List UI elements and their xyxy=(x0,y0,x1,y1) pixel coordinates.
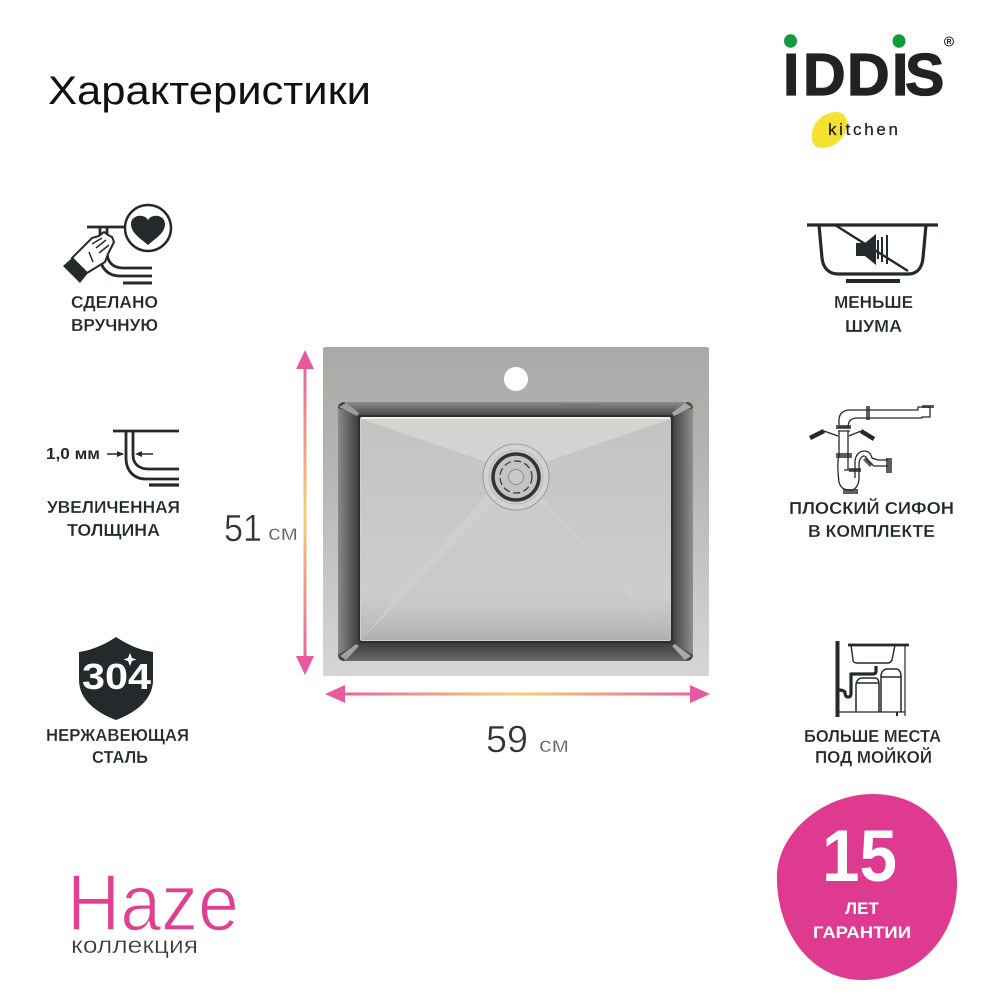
basin walls xyxy=(338,402,693,661)
arrow: height dimension xyxy=(296,350,314,675)
logo: IDDIS kitchen xyxy=(783,34,954,148)
label: handmade xyxy=(71,292,158,335)
label: thickness: ТОЛЩИНА xyxy=(67,520,160,540)
basin floor xyxy=(358,415,673,643)
sink top plate xyxy=(323,347,709,676)
sink product image xyxy=(323,347,709,676)
icon: handmade sink with heart xyxy=(63,205,171,283)
label: less noise: ШУМА xyxy=(845,316,902,336)
icon: 304 shield: 304 xyxy=(82,656,151,697)
icon: flat siphon xyxy=(810,405,934,494)
logo: IDDIS kitchen: kitchen xyxy=(828,120,898,139)
warranty badge: ГАРАНТИИ xyxy=(813,923,911,942)
warranty badge: 15 xyxy=(822,816,897,897)
dimension: 59 cm: см xyxy=(539,734,569,757)
logo: IDDIS kitchen: IDDIS xyxy=(783,42,944,108)
label: less noise xyxy=(834,292,913,336)
label: more space: ПОД МОЙКОЙ xyxy=(815,746,932,767)
arrow: width dimension xyxy=(325,685,710,703)
dimension: 51 cm: см xyxy=(268,522,298,545)
label: less noise: МЕНЬШЕ xyxy=(834,292,913,312)
label: flat siphon: В КОМПЛЕКТЕ xyxy=(808,521,935,541)
label: more space: БОЛЬШЕ МЕСТА xyxy=(804,726,941,746)
label: stainless steel: СТАЛЬ xyxy=(92,747,148,767)
icon: thickness 1.0 mm xyxy=(46,431,179,485)
dimension: 59 cm xyxy=(486,719,569,761)
icon: thickness 1.0 mm: 1,0 мм xyxy=(46,446,100,463)
dimension: 51 cm: 51 xyxy=(224,508,262,550)
drain xyxy=(483,444,549,510)
label: more space xyxy=(804,726,941,767)
label: thickness xyxy=(47,497,180,540)
logo: IDDIS kitchen: R xyxy=(946,39,952,46)
label: handmade: ВРУЧНУЮ xyxy=(71,315,158,335)
warranty badge xyxy=(777,794,957,980)
dimension: 51 cm xyxy=(224,508,298,550)
label: flat siphon xyxy=(789,497,954,541)
collection name: Haze: коллекция xyxy=(71,932,198,958)
dimension: 59 cm: 59 xyxy=(486,719,528,761)
icon: less noise xyxy=(807,225,938,281)
collection name: Haze: Haze xyxy=(67,858,239,947)
title: Характеристики xyxy=(48,69,371,113)
warranty badge: ЛЕТ xyxy=(845,899,879,918)
icon: 304 shield xyxy=(79,637,153,720)
label: handmade: СДЕЛАНО xyxy=(71,292,158,312)
label: stainless steel: НЕРЖАВЕЮЩАЯ xyxy=(46,725,189,745)
faucet hole xyxy=(504,367,528,391)
icon: more space under the sink xyxy=(836,641,909,717)
label: flat siphon: ПЛОСКИЙ СИФОН xyxy=(789,497,954,518)
label: stainless steel xyxy=(46,725,189,767)
label: thickness: УВЕЛИЧЕННАЯ xyxy=(47,497,180,517)
